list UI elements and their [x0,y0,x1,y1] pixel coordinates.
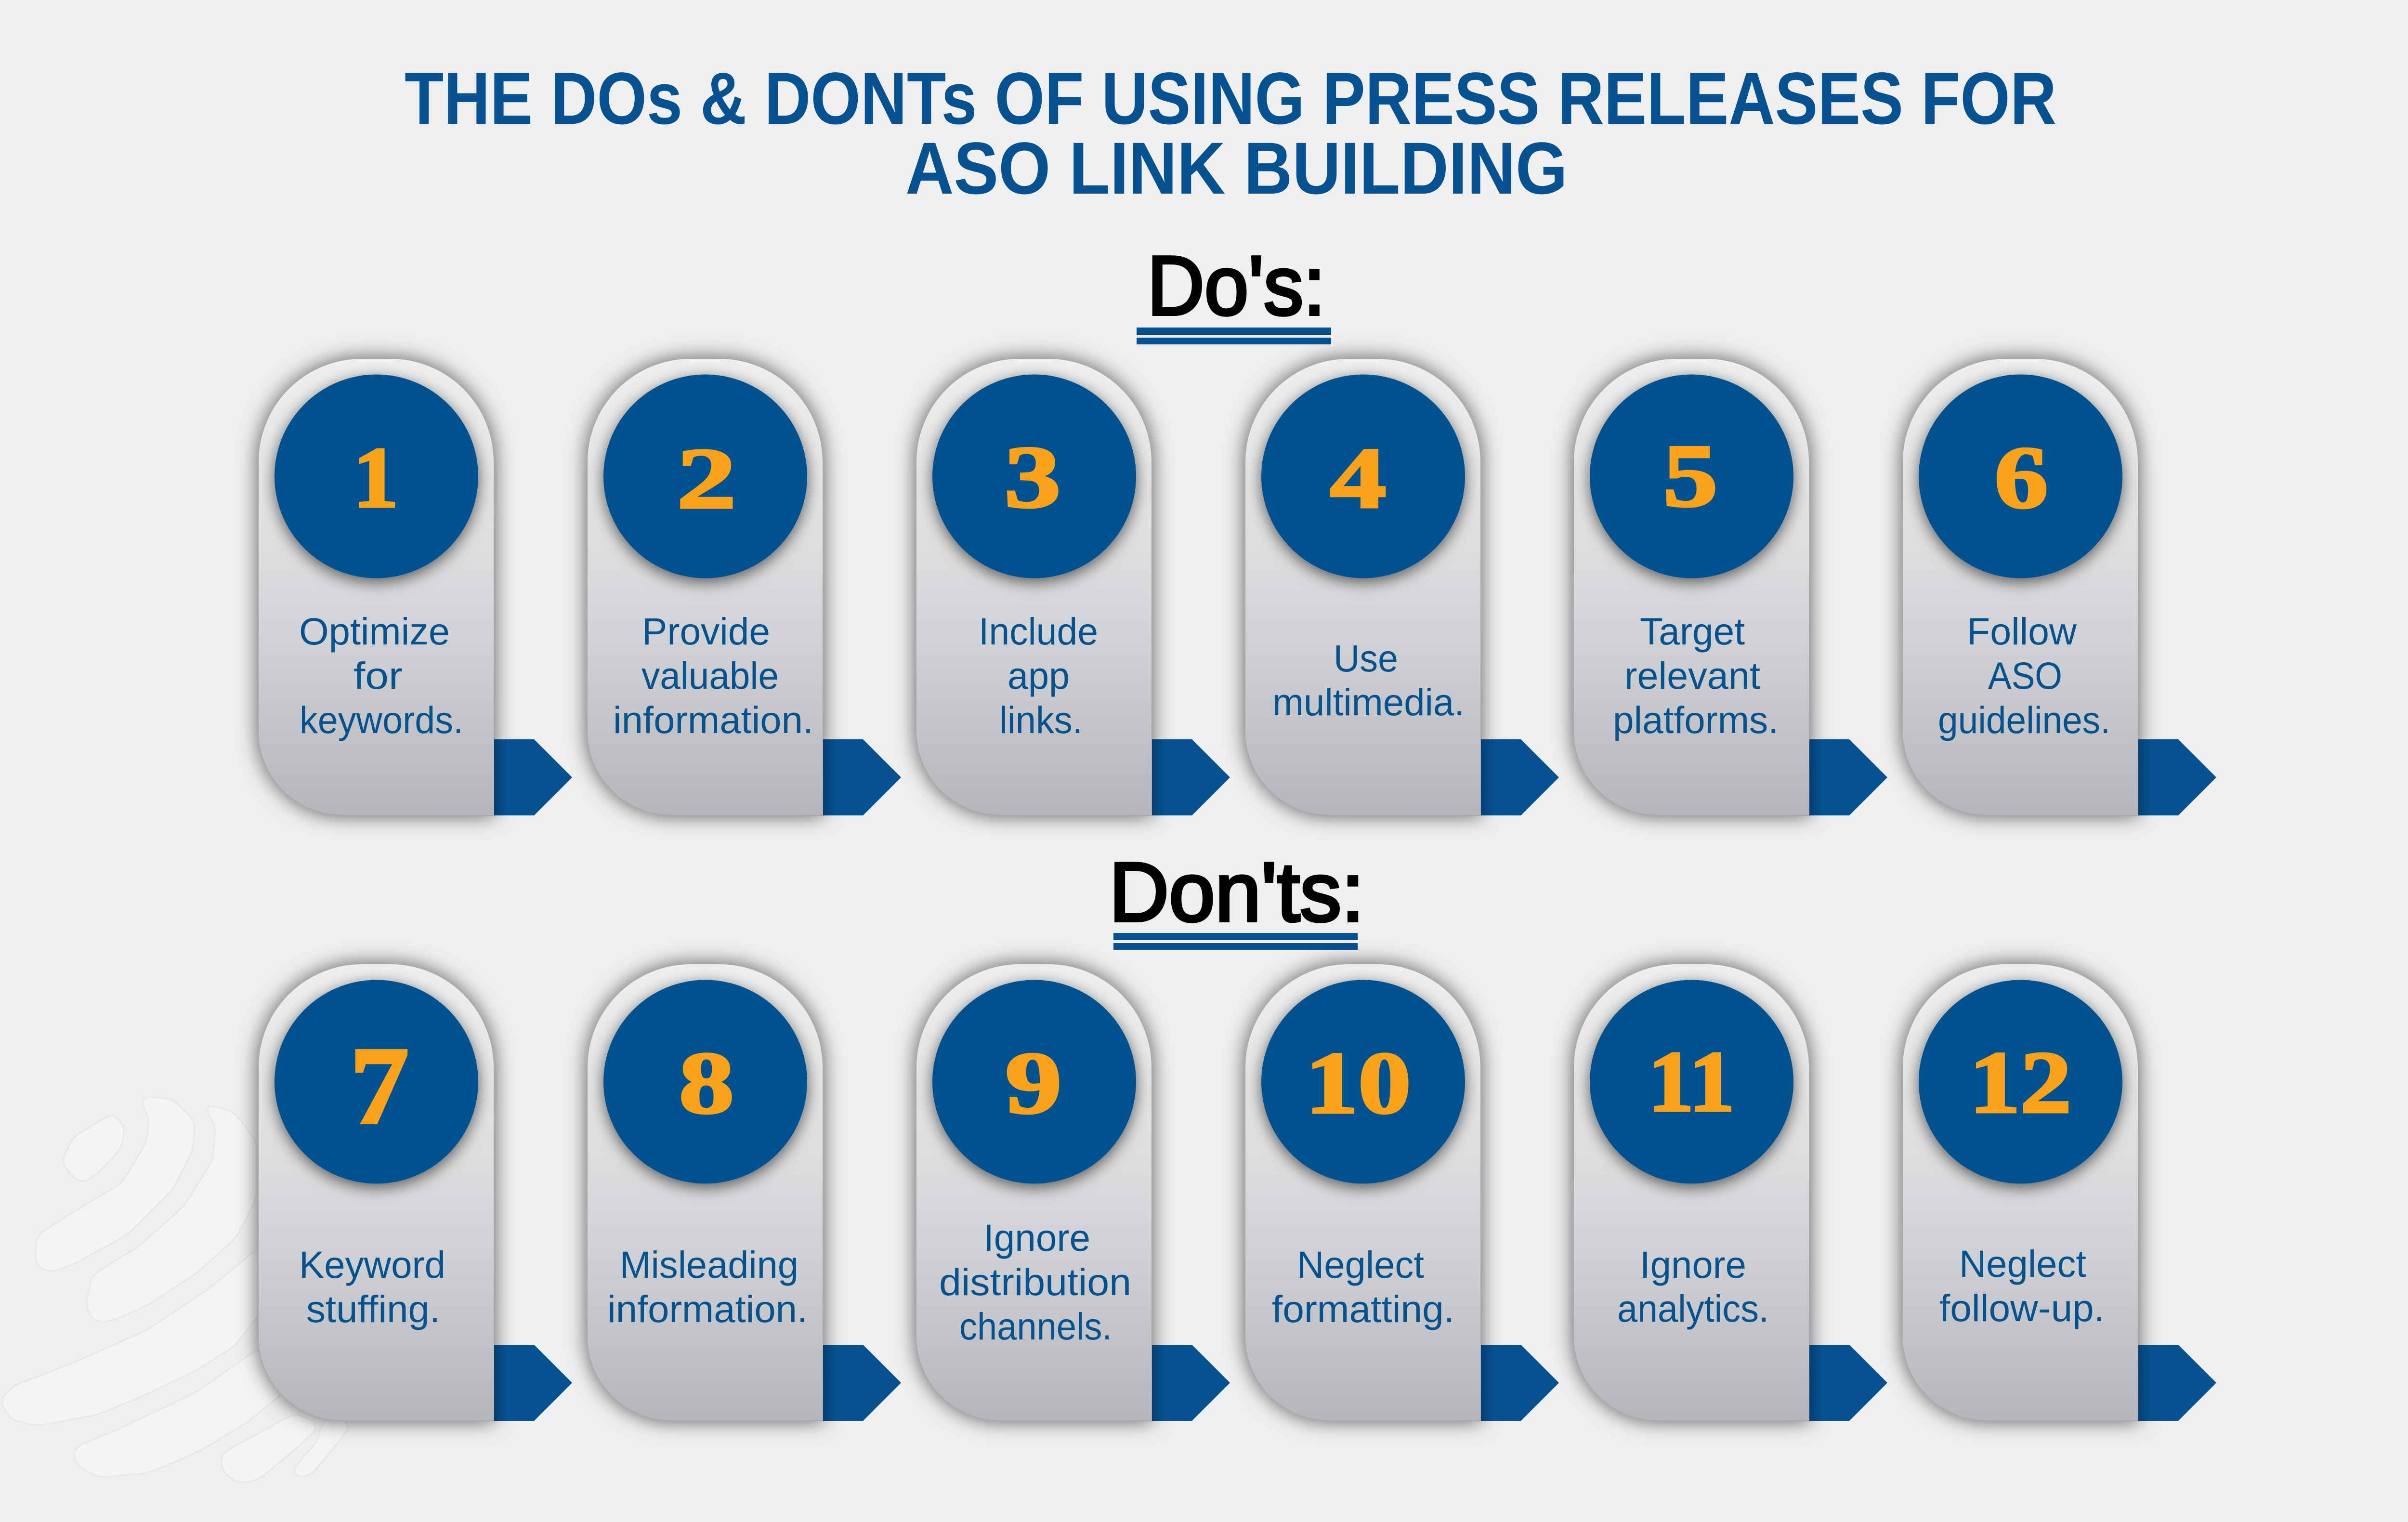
number: 8 [679,1034,734,1132]
title [405,57,2056,210]
arrow [1481,739,1559,815]
card 8 [587,964,901,1421]
title: ASO LINK BUILDING [905,127,1568,210]
card body [587,358,823,815]
card text [299,1243,445,1330]
card text: relevant [1624,654,1760,697]
heading: Don'ts: Don'ts: [1109,845,1364,939]
card 2 [587,358,901,815]
card body [1245,964,1481,1421]
arrow [823,739,901,815]
card body [1573,964,1809,1421]
card 7 [258,964,572,1421]
card body [1573,358,1809,815]
arrow [1152,1345,1230,1421]
card text [1272,1243,1454,1330]
arrow [494,739,572,815]
card text: Misleading [620,1243,798,1286]
number: 4 [1330,430,1386,526]
number circle [1919,375,2122,578]
card text [299,610,463,741]
card 11 [1573,964,1887,1421]
card text: follow-up. [1939,1286,2105,1329]
card text: Ignore [983,1216,1090,1259]
card text [613,610,813,741]
number: 11 [1648,1034,1735,1130]
card text: information. [607,1287,808,1330]
card body [258,964,494,1421]
card text: Follow [1967,610,2077,653]
card text: formatting. [1272,1287,1454,1330]
arrow [823,1345,901,1421]
number: 2 [677,431,736,526]
arrow [494,1345,572,1421]
card text: information. [613,698,813,741]
number: 6 [1994,429,2048,526]
card text: Ignore [1640,1243,1746,1286]
arrow [1809,1345,1887,1421]
number: 1 [353,430,398,525]
card 10 [1245,964,1559,1421]
card text: Provide [642,610,770,653]
number circle [603,375,807,578]
card text [1939,1242,2105,1329]
card 12 [1902,964,2216,1421]
card text: distribution [939,1260,1131,1303]
card text: Include [979,610,1098,653]
number circle [1919,980,2122,1184]
number circle [603,980,807,1184]
number circle [1261,980,1465,1184]
card body [1902,964,2138,1421]
card text: keywords. [300,698,463,741]
number circle [1590,375,1793,578]
card body [916,358,1152,815]
card text: channels. [959,1305,1112,1348]
card text: Neglect [1959,1242,2086,1285]
number circle [275,375,478,578]
card 1 [258,358,572,815]
card 3 [916,358,1230,815]
number circle [1590,980,1793,1184]
card text [607,1243,808,1330]
card 6 [1902,358,2216,815]
heading: Do's: Do's: [1147,238,1325,332]
card text: ASO [1988,654,2062,697]
card text: Optimize [299,610,450,653]
card text [1613,610,1779,741]
arrow [1481,1345,1559,1421]
number circle [1261,375,1465,578]
number: 9 [1006,1035,1061,1132]
card text: links. [999,698,1083,741]
card text: analytics. [1617,1287,1769,1330]
number circle [932,375,1136,578]
arrow [2138,739,2216,815]
number: 7 [350,1025,409,1147]
card text: Keyword [299,1243,445,1286]
card text [1617,1243,1769,1330]
number circle [932,980,1136,1184]
card text: Target [1640,610,1745,653]
card 4 [1245,358,1559,815]
arrow [1152,739,1230,815]
arrow [1809,739,1887,815]
card text: multimedia. [1272,681,1465,723]
card body [916,964,1152,1421]
card text: Neglect [1297,1243,1424,1286]
arrow [2138,1345,2216,1421]
card body [258,358,494,815]
card body [587,964,823,1421]
card body [1245,358,1481,815]
number: 12 [1969,1033,2071,1131]
card text [1272,637,1465,723]
number: 5 [1663,426,1718,525]
card 9 [916,964,1230,1421]
card text [979,610,1098,741]
card text: guidelines. [1938,698,2110,741]
card text: platforms. [1613,698,1779,741]
card text [939,1216,1131,1348]
title: THE DOs & DONTs OF USING PRESS RELEASES FOR [405,57,2056,140]
card 5 [1573,358,1887,815]
card text [1938,610,2110,741]
card text: stuffing. [306,1287,440,1330]
number: 10 [1305,1034,1411,1132]
card text: Use [1334,637,1398,680]
card text: valuable [641,654,779,697]
watermark: globe logo [0,1097,352,1483]
card text: for [353,654,403,697]
number: 3 [1005,429,1060,526]
number circle [275,980,478,1184]
card body [1902,358,2138,815]
card text: app [1008,654,1070,697]
